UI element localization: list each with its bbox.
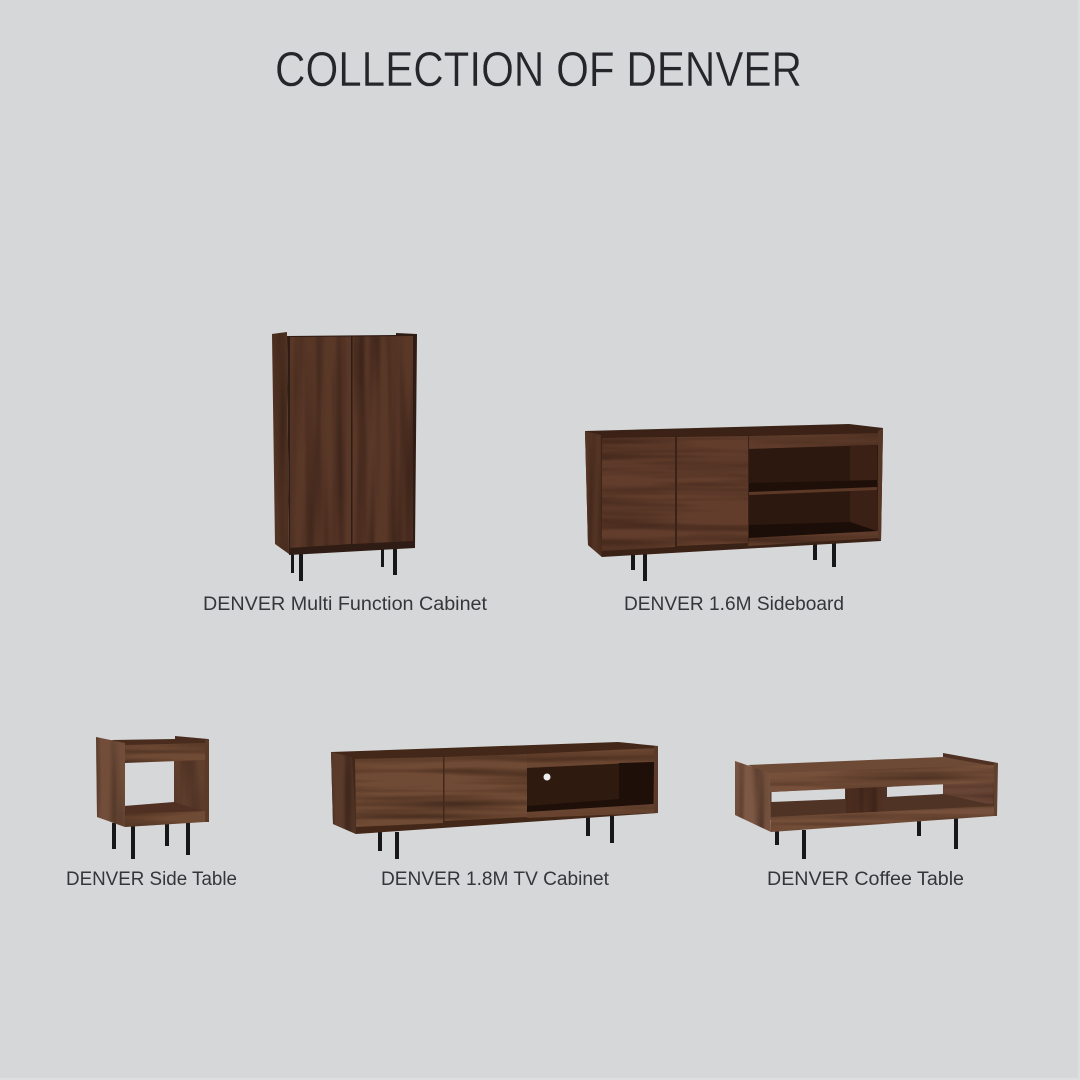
coffee table lower front xyxy=(771,806,994,832)
tv cabinet open compartment xyxy=(527,762,654,818)
panel: multi function cabinet xyxy=(272,332,417,581)
cabinet legs xyxy=(291,547,397,581)
tv cabinet body xyxy=(331,742,658,834)
coffee table legs xyxy=(775,818,958,859)
title: COLLECTION OF DENVER xyxy=(275,43,802,97)
tv cabinet legs xyxy=(378,815,614,859)
panel: coffee table xyxy=(735,753,998,859)
sideboard body xyxy=(585,424,883,557)
label: tv cabinet: DENVER 1.8M TV Cabinet xyxy=(381,869,610,890)
coffee table body xyxy=(735,753,998,832)
side table lower front xyxy=(125,811,205,827)
side table body xyxy=(96,736,209,827)
tv cabinet doors xyxy=(355,748,654,827)
label: coffee table: DENVER Coffee Table xyxy=(767,869,964,890)
cabinet body xyxy=(272,332,417,555)
sideboard open shelves xyxy=(748,445,878,546)
label: multi function cabinet: DENVER Multi Function Cabinet xyxy=(203,594,488,615)
side table legs xyxy=(112,822,190,859)
label: side table: DENVER Side Table xyxy=(66,869,237,890)
panel: side table xyxy=(96,736,209,859)
cabinet doors xyxy=(290,336,413,548)
sideboard legs xyxy=(631,540,836,581)
panel: tv cabinet xyxy=(331,742,658,859)
coffee table drawer xyxy=(770,765,994,792)
side table drawer xyxy=(125,743,205,763)
sideboard doors xyxy=(602,433,878,551)
label: sideboard: DENVER 1.6M Sideboard xyxy=(624,594,844,615)
panel: sideboard xyxy=(585,424,883,581)
